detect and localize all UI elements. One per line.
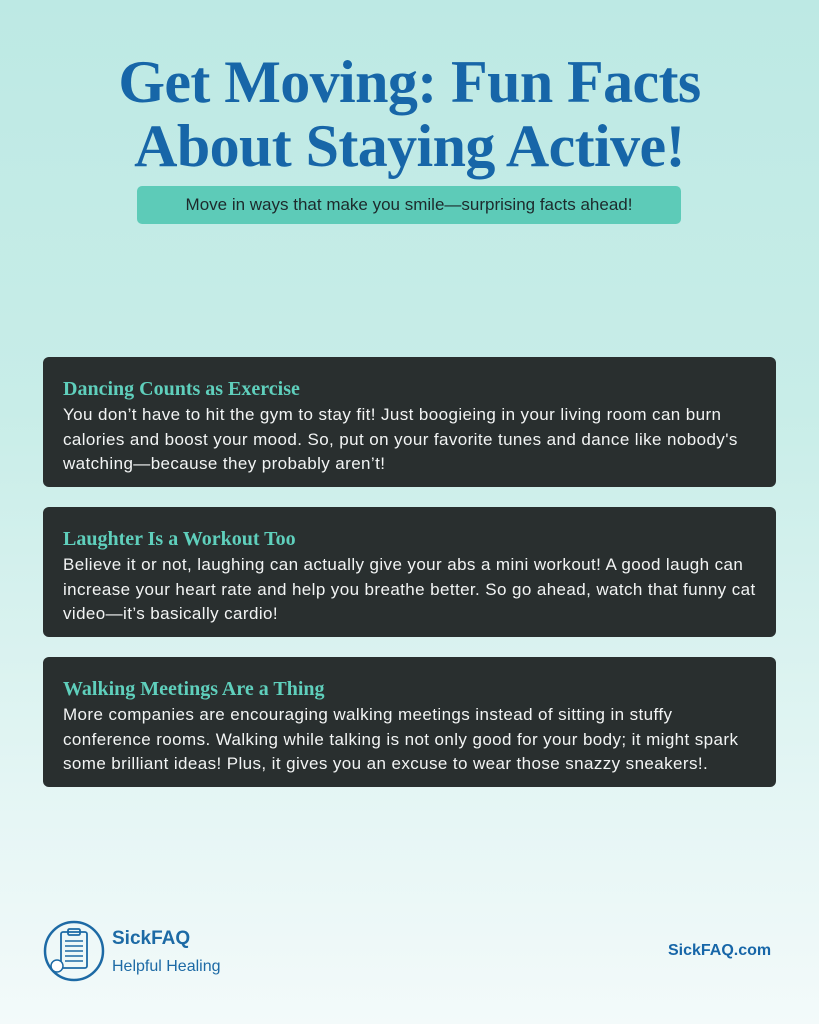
text: laughter: Believe it or not, laughing can actually give your abs a mini workout! A good laugh can increase your heart rate and help you breathe better. So go ahead, watch that funny cat video—it’s basically cardio! bbox=[63, 555, 756, 623]
title: Get Moving: Fun Facts bbox=[118, 49, 701, 115]
text: dancing: You don’t have to hit the gym to stay fit! Just boogieing in your living room can burn calories and boost your mood. So, put on your favorite tunes and dance like nobody's watching—because they probably aren’t! bbox=[63, 405, 738, 473]
heading: dancing: Dancing Counts as Exercise bbox=[63, 378, 300, 400]
title: About Staying Active! bbox=[134, 113, 685, 179]
heading: walking: Walking Meetings Are a Thing bbox=[63, 678, 325, 700]
url: SickFAQ.com bbox=[668, 942, 771, 959]
heading: laughter: Laughter Is a Workout Too bbox=[63, 528, 296, 550]
subtitle pill: Move in ways that make you smile—surprising facts ahead! bbox=[186, 195, 632, 214]
card: walking meetings bbox=[43, 657, 776, 787]
logo bbox=[44, 920, 221, 982]
title bbox=[118, 49, 701, 180]
card: dancing bbox=[43, 357, 776, 487]
subtitle pill bbox=[137, 186, 681, 224]
icon: clipboard bbox=[44, 920, 104, 982]
card: laughter bbox=[43, 507, 776, 637]
brand name: SickFAQ bbox=[112, 928, 190, 949]
text: walking: More companies are encouraging walking meetings instead of sitting in stuffy conference rooms. Walking while talking is not only good for your body; it might spark some brilliant ideas! Plus, it gives you an excuse to wear those snazzy sneakers!. bbox=[63, 705, 738, 773]
tagline: Helpful Healing bbox=[112, 958, 221, 975]
